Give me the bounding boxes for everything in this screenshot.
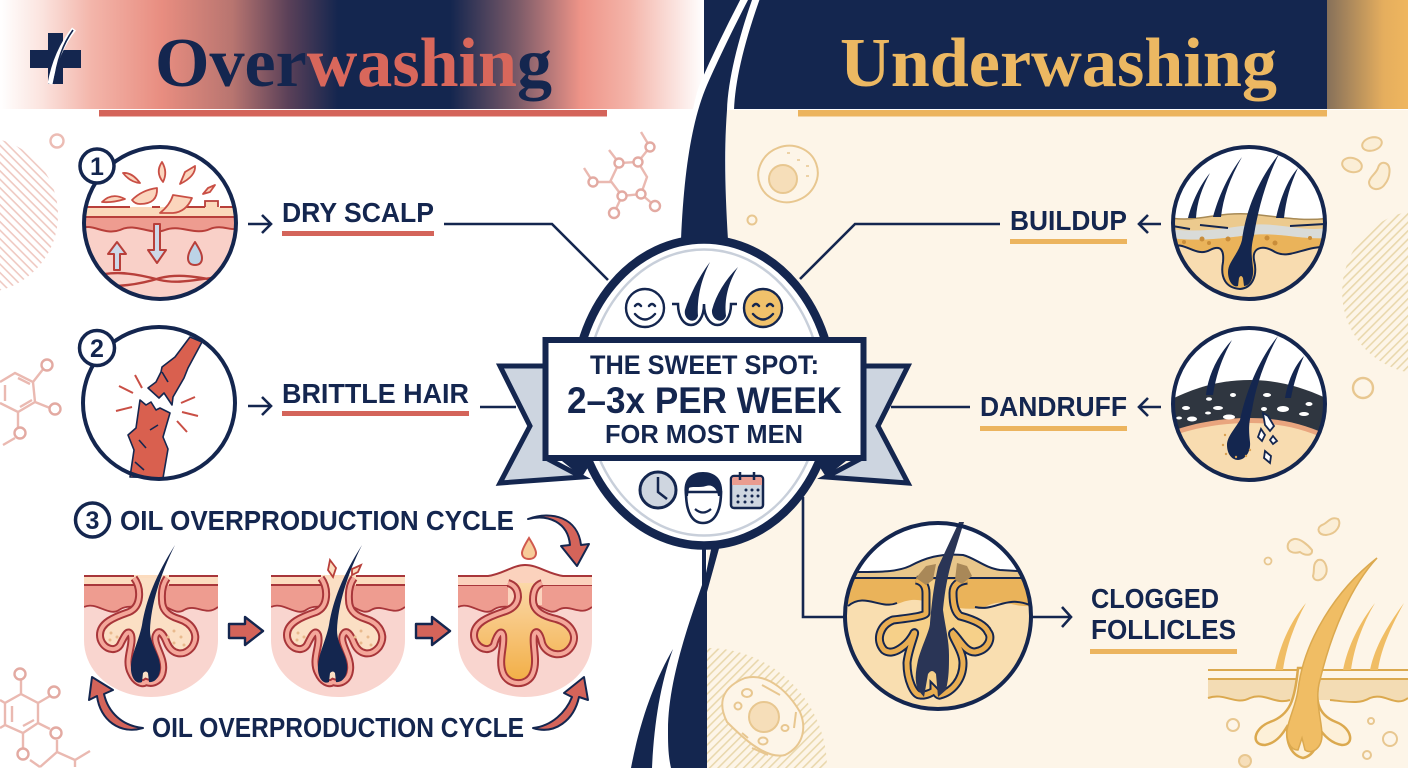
label: brittle hair: BRITTLE HAIR: [282, 378, 469, 409]
title underline: overwashing: [99, 110, 607, 116]
decor: cell top: [750, 137, 826, 211]
oil drop: [522, 538, 536, 559]
label: oil overproduction cycle bottom: OIL OVERPRODUCTION CYCLE: [152, 712, 524, 743]
medallion: [575, 240, 833, 546]
arrow to brittle hair: [248, 397, 271, 415]
panel: brittle hair circle: [80, 327, 235, 479]
decor: right striped circle: [1342, 212, 1408, 372]
central hair strand upper: [681, 0, 752, 240]
cream background of underwashing side: [707, 110, 1408, 768]
label: clogged follicles: FOLLICLES: [1091, 614, 1236, 645]
title: Overwashing: Overwashing: [155, 25, 552, 102]
title: Underwashing: Underwashing: [840, 25, 1277, 102]
connector lines: [444, 224, 1000, 617]
arrow: heading to third panel: [528, 515, 589, 566]
label: dandruff: DANDRUFF: [980, 391, 1127, 422]
arrow: stage 2 to 3: [416, 617, 450, 645]
decor: small pink ring: [50, 134, 64, 148]
arrow from buildup: [1139, 215, 1161, 233]
decor: left pink striped circle: [0, 140, 58, 290]
badge 2: 2: [90, 335, 104, 363]
decor: cell bottom: [722, 677, 803, 756]
panel: follicle stage 1: [84, 545, 218, 697]
header band: overwashing: [0, 0, 704, 109]
central hair strand lower: [668, 545, 720, 768]
hair broken: [128, 337, 202, 478]
label: clogged follicles: [1090, 583, 1237, 654]
clump plugs: [916, 563, 972, 585]
arrow to dry scalp: [248, 215, 271, 233]
icon: hair follicles: [672, 262, 738, 325]
decor: small ring: [748, 216, 756, 224]
hair wisp lower: [631, 649, 673, 768]
banner: the sweet spot: 2–3x PER WEEK: [567, 380, 842, 421]
label: dry scalp: DRY SCALP: [282, 197, 434, 228]
hair: [916, 522, 964, 697]
arrow: cycle right: [533, 677, 588, 730]
banner: the sweet spot: [546, 340, 864, 477]
heading: oil overproduction cycle: 3: [86, 507, 99, 535]
badge 1: 1: [90, 153, 104, 181]
icon: calendar: [731, 472, 763, 508]
arrow: stage 1 to 2: [229, 617, 263, 645]
panel: dry scalp circle: [80, 147, 240, 305]
decor: molecule bottom: [0, 668, 90, 767]
ribbon tails: [500, 366, 908, 483]
heading: oil overproduction cycle: OIL OVERPRODUCTION CYCLE: [120, 505, 514, 536]
title underline: underwashing: [798, 110, 1327, 116]
logo: hair cross: [30, 29, 81, 84]
arrow to clogged follicles: [1031, 607, 1071, 627]
panel: follicle stage 3: [458, 565, 592, 697]
badge 2: [80, 330, 114, 366]
panel: dandruff circle: [1170, 328, 1330, 485]
header band: underwashing: [704, 0, 1408, 109]
flakes: [102, 162, 215, 213]
panel: clogged follicles circle: [845, 522, 1035, 712]
decor: bottom striped circle: [707, 648, 827, 768]
arrow: cycle back left: [89, 677, 143, 730]
icon: smile white: [626, 289, 664, 327]
decor: bean shapes: [1341, 135, 1390, 189]
decor: molecule left: [0, 360, 60, 445]
badge 1: [80, 149, 114, 183]
panel: buildup circle: [1170, 147, 1330, 300]
banner: the sweet spot: THE SWEET SPOT:: [590, 350, 819, 380]
decor: ring right: [1353, 378, 1373, 398]
banner: the sweet spot: FOR MOST MEN: [605, 419, 803, 449]
icon: smile gold: [744, 289, 782, 327]
label: buildup: BUILDUP: [1010, 205, 1127, 236]
label: clogged follicles: CLOGGED: [1091, 583, 1219, 614]
panel: follicle stage 2: [271, 545, 405, 697]
moisture arrows and drop: [108, 224, 202, 270]
arrow from dandruff: [1139, 398, 1161, 416]
decor: bottom right gold hair illustration: [1208, 518, 1408, 767]
crack rays: [116, 375, 198, 432]
decor: molecule top: [584, 132, 660, 218]
icon: face: [684, 472, 722, 523]
icon: clock: [640, 472, 676, 508]
